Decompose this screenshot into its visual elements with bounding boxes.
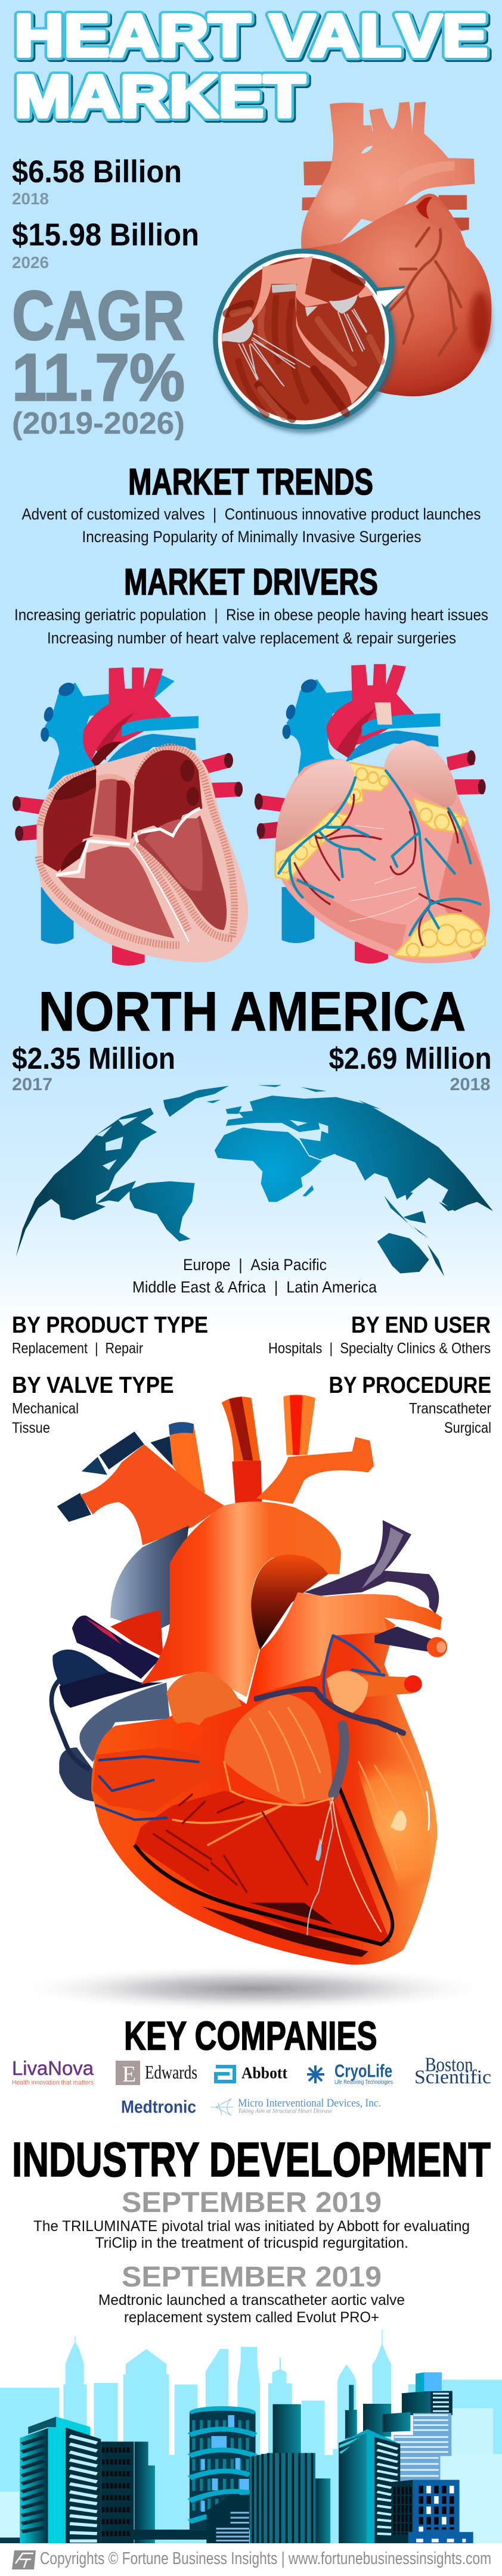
stat: CAGR 11.7% (2019-2026): (2019-2026) bbox=[12, 406, 185, 441]
development: September 2019 Medtronic bbox=[98, 2261, 405, 2326]
logo: Edwards: E bbox=[122, 2062, 136, 2087]
segment: by procedure bbox=[329, 1373, 491, 1436]
segment: by product type: BY PRODUCT TYPE bbox=[12, 1312, 208, 1338]
segment: by procedure: Transcatheter bbox=[409, 1401, 491, 1417]
segment: by product type: Replacement | Repair bbox=[12, 1340, 143, 1357]
shadow under large heart bbox=[8, 1965, 497, 2012]
text: market trends list bbox=[21, 505, 481, 546]
footer band bbox=[0, 2543, 502, 2576]
heading: Market Trends: MARKET TRENDS bbox=[128, 462, 373, 503]
text: other regions: Middle East & Africa | Latin America bbox=[132, 1278, 377, 1296]
stat: 2026 market value: $15.98 Billion bbox=[12, 217, 199, 253]
segment: by valve type bbox=[12, 1373, 174, 1436]
stat: North America 2018 bbox=[329, 1041, 491, 1094]
development: September 2019 Abbott: SEPTEMBER 2019 bbox=[122, 2187, 382, 2219]
logo: Edwards bbox=[116, 2061, 197, 2087]
logo: CryoLife: Life Restoring Technologies bbox=[334, 2079, 393, 2086]
stat: North America 2017: 2017 bbox=[12, 1075, 52, 1094]
logo: Medtronic: Medtronic bbox=[121, 2098, 196, 2117]
development: September 2019 Abbott bbox=[33, 2187, 470, 2251]
development: September 2019 Medtronic: replacement system called Evolut PRO+ bbox=[124, 2309, 379, 2326]
segment: by procedure: Surgical bbox=[444, 1420, 491, 1436]
logo: LivaNova: LivaNova bbox=[12, 2057, 94, 2079]
title: Heart Valve Market: HEART VALVE bbox=[16, 4, 489, 71]
illustration: city skyline bbox=[0, 2329, 502, 2544]
text: other regions bbox=[132, 1256, 377, 1296]
stat: CAGR 11.7% (2019-2026) bbox=[12, 276, 185, 441]
development: September 2019 Medtronic: Medtronic launched a transcatheter aortic valve bbox=[98, 2292, 405, 2309]
title: Heart Valve Market: MARKET bbox=[14, 63, 305, 130]
logo: Micro Interventional Devices: Micro Interventional Devices, Inc. bbox=[238, 2097, 381, 2110]
map: world hemisphere bbox=[16, 1085, 493, 1277]
logo: Boston Scientific: Scientific bbox=[414, 2067, 491, 2088]
title: Heart Valve Market: MARKET bbox=[14, 63, 305, 130]
text: market trends list: Increasing Popularity of Minimally Invasive Surgeries bbox=[82, 528, 421, 546]
segment: by product type bbox=[12, 1312, 208, 1357]
development: September 2019 Medtronic: SEPTEMBER 2019 bbox=[122, 2261, 382, 2293]
logo: Boston Scientific: Boston bbox=[425, 2054, 473, 2076]
stat: 2026 market value: 2026 bbox=[12, 253, 49, 272]
logo: Micro Interventional Devices bbox=[210, 2097, 381, 2115]
stat: North America 2017 bbox=[12, 1041, 175, 1094]
logo: CryoLife: CryoLife bbox=[334, 2061, 392, 2082]
illustration: magnified valve inset bbox=[213, 248, 405, 433]
logo: Abbott bbox=[216, 2064, 287, 2082]
heading: Key Companies: KEY COMPANIES bbox=[124, 2014, 377, 2059]
illustration: anatomical heart bbox=[301, 102, 491, 396]
logo: Micro Interventional Devices: Taking Aim at Structural Heart Disease bbox=[238, 2108, 333, 2115]
illustration: heart cross-section bbox=[13, 667, 248, 966]
logo: LivaNova: Health innovation that matters bbox=[12, 2079, 94, 2086]
text: market drivers list: Increasing number of heart valve replacement & repair surgeries bbox=[47, 629, 456, 647]
segment: by valve type: BY VALVE TYPE bbox=[12, 1373, 174, 1398]
heading: Market Drivers: MARKET DRIVERS bbox=[124, 562, 378, 603]
title: Heart Valve Market: HEART VALVE bbox=[14, 2, 488, 69]
text: other regions: Europe | Asia Pacific bbox=[183, 1256, 327, 1274]
stat: North America 2018: 2018 bbox=[450, 1075, 490, 1094]
development: September 2019 Abbott: TriClip in the treatment of tricuspid regurgitation. bbox=[95, 2235, 408, 2251]
title: Heart Valve Market: HEART VALVE bbox=[14, 2, 488, 69]
stat: 2018 market value bbox=[12, 154, 182, 208]
text: market drivers list bbox=[14, 606, 488, 647]
stat: CAGR 11.7% (2019-2026): 11.7% bbox=[12, 340, 185, 415]
logo: CryoLife bbox=[307, 2061, 393, 2086]
logo: Boston Scientific bbox=[414, 2054, 491, 2088]
icon: Fortune Business Insights logo bbox=[12, 2550, 36, 2569]
logo: Abbott: Abbott bbox=[241, 2064, 287, 2082]
illustration: large stylised heart bbox=[51, 1395, 447, 1965]
title: Heart Valve Market bbox=[14, 2, 489, 132]
segment: by end user bbox=[268, 1312, 491, 1357]
stat: 2026 market value bbox=[12, 217, 199, 272]
stat: 2018 market value: $6.58 Billion bbox=[12, 154, 182, 189]
title: Heart Valve Market: MARKET bbox=[16, 65, 307, 132]
heading: North America: NORTH AMERICA bbox=[38, 980, 466, 1043]
segment: by valve type: Mechanical bbox=[12, 1401, 79, 1417]
logo: Edwards: Edwards bbox=[145, 2061, 197, 2083]
stat: North America 2017: $2.35 Million bbox=[12, 1041, 175, 1075]
stat: CAGR 11.7% (2019-2026): CAGR bbox=[12, 276, 185, 354]
segment: by valve type: Tissue bbox=[12, 1420, 50, 1436]
illustration: heart exterior with coronary vessels bbox=[255, 664, 490, 963]
stat: 2018 market value: 2018 bbox=[12, 189, 49, 208]
development: September 2019 Abbott: The TRILUMINATE pivotal trial was initiated by Abbott for evaluating bbox=[33, 2218, 470, 2235]
